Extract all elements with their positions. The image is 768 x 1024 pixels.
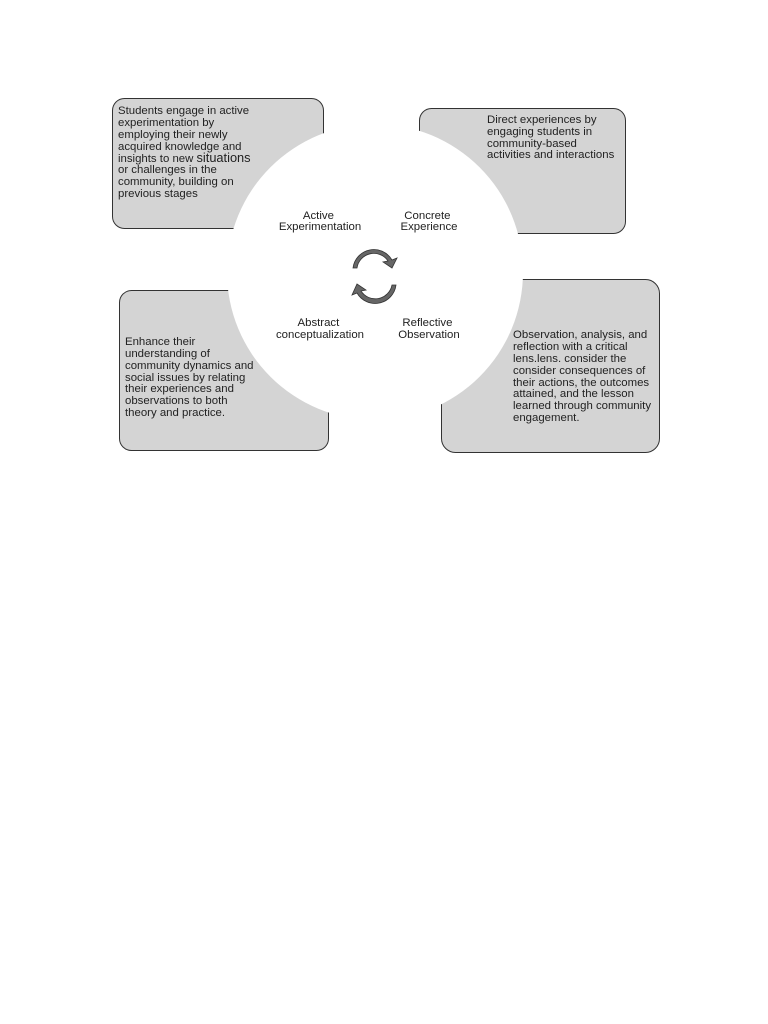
text: active experimentation description: acquired knowledge and xyxy=(118,141,242,153)
text: active experimentation description: Students engage in active xyxy=(118,105,249,117)
text: reflective observation description: consider consequences of xyxy=(513,365,646,377)
text: reflective observation description: lens.lens. consider the xyxy=(513,353,626,365)
text: abstract conceptualization description: their experiences and xyxy=(125,383,234,395)
box: reflective observation description xyxy=(442,280,660,452)
text: active experimentation description: or challenges in the xyxy=(118,164,217,176)
label: abstract conceptualization: Abstract xyxy=(298,317,340,329)
box: active experimentation description xyxy=(112,98,324,228)
label: reflective observation: Observation xyxy=(398,329,460,341)
text: active experimentation description: experimentation by xyxy=(118,117,215,129)
label: concrete experience: Experience xyxy=(400,221,458,233)
text: abstract conceptualization description: Enhance their xyxy=(125,336,195,348)
text: abstract conceptualization description: community dynamics and xyxy=(125,360,254,372)
label: abstract conceptualization: conceptualization xyxy=(276,329,364,341)
label: active experimentation: Experimentation xyxy=(279,221,361,233)
text: reflective observation description: engagement. xyxy=(513,412,580,424)
text: active experimentation description: insights to new situations xyxy=(118,150,251,165)
label: active experimentation: Active xyxy=(303,210,334,222)
text: abstract conceptualization description: understanding of xyxy=(125,348,211,360)
text: abstract conceptualization description: theory and practice. xyxy=(125,407,225,419)
text: active experimentation description: previous stages xyxy=(118,188,198,200)
text: reflective observation description: learned through community xyxy=(513,400,651,412)
text: reflective observation description: their actions, the outcomes xyxy=(513,377,649,389)
text: reflective observation description: Observation, analysis, and xyxy=(513,329,647,341)
label: reflective observation: Reflective xyxy=(402,317,452,329)
text: concrete experience description: engaging students in xyxy=(487,126,592,138)
text: reflective observation description: attained, and the lesson xyxy=(513,388,634,400)
label: concrete experience: Concrete xyxy=(404,210,451,222)
text: concrete experience description: activities and interactions xyxy=(487,149,615,161)
text: concrete experience description: community-based xyxy=(487,138,577,150)
text: active experimentation description: community, building on xyxy=(118,176,234,188)
box: abstract conceptualization description xyxy=(120,290,328,450)
icon: cycle arrows xyxy=(352,250,397,303)
text: active experimentation description: employing their newly xyxy=(118,129,228,141)
text: abstract conceptualization description: social issues by relating xyxy=(125,372,245,384)
central white circle xyxy=(227,124,523,420)
text: reflective observation description: reflection with a critical xyxy=(513,341,628,353)
text: abstract conceptualization description: observations to both xyxy=(125,395,228,407)
text: concrete experience description: Direct experiences by xyxy=(487,114,597,126)
box: concrete experience description xyxy=(420,108,626,234)
